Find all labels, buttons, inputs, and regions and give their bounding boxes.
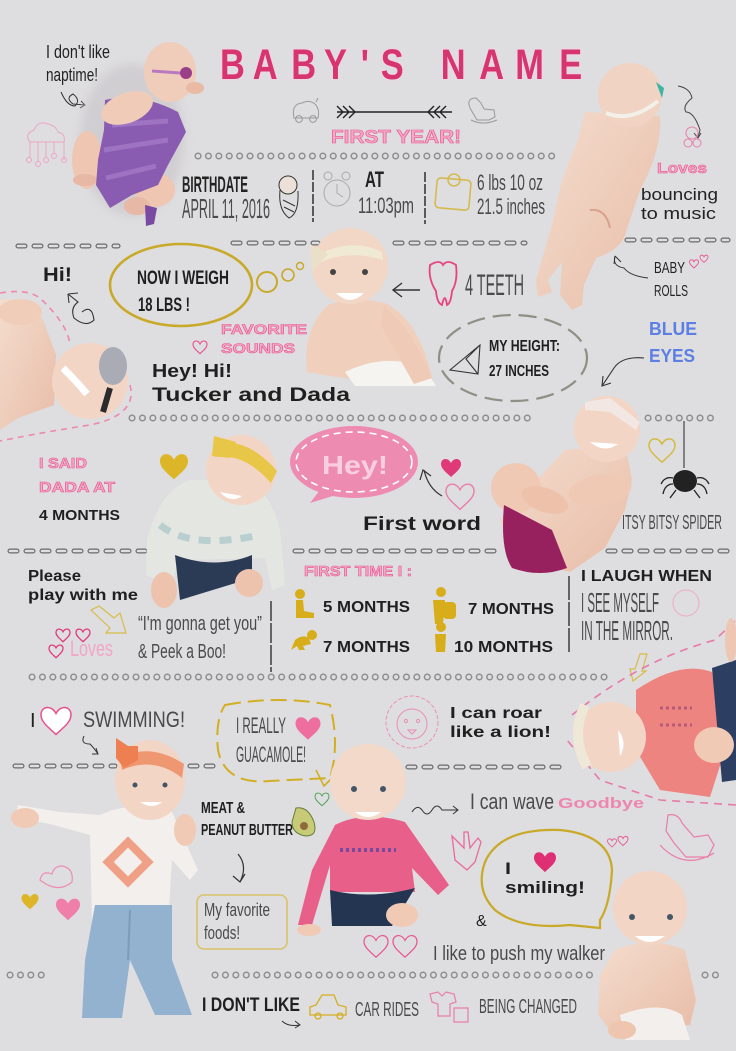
callout: hey <box>290 426 418 503</box>
photo: lying baby <box>0 292 131 441</box>
text: please play with me: play with me <box>28 587 138 604</box>
icon: heart <box>296 717 320 740</box>
icon: cloud mobile <box>26 123 66 166</box>
panel: first time I: 7 MONTHS <box>323 639 410 656</box>
text: I said dada: DADA AT <box>39 479 115 496</box>
icon: hearts and arrow <box>420 459 474 509</box>
photo: baby lying with pink top <box>567 618 736 805</box>
icon: crawling baby <box>291 630 317 650</box>
icon: heart <box>193 341 207 354</box>
icon: swaddled baby <box>279 176 298 218</box>
text: walker <box>364 913 605 965</box>
text: favorite sounds: SOUNDS <box>221 340 295 356</box>
icon: rocking horse <box>469 98 497 123</box>
text: meat and peanut butter <box>201 800 293 839</box>
birth info: 6 lbs 10 oz <box>477 170 543 195</box>
dividers <box>10 156 736 975</box>
birth info: 11:03pm <box>358 193 414 218</box>
text: baby rolls: BABY <box>654 260 685 277</box>
icon: baby face <box>673 590 699 616</box>
text: I love swimming <box>30 707 185 754</box>
callout: favorite foods <box>197 895 287 949</box>
photo: smiling baby with cream headband <box>306 228 436 386</box>
text: roar <box>450 705 551 741</box>
icon: walking baby <box>435 622 446 652</box>
text: wave goodbye <box>412 789 644 814</box>
icon: hearts <box>690 255 708 268</box>
icon: gold heart <box>160 454 188 479</box>
text: hi: Hi! <box>43 265 72 286</box>
icon: alarm clock <box>324 172 350 206</box>
callout: height: MY HEIGHT: <box>489 338 560 355</box>
text: favorite sounds <box>152 321 351 406</box>
text: favorite sounds: FAVORITE <box>221 321 307 337</box>
icon: dancing hearts <box>364 936 417 957</box>
icon: toy elephant <box>293 98 319 122</box>
callout: favorite foods: My favorite <box>204 900 270 920</box>
heading: first year: FIRST YEAR! <box>331 127 461 147</box>
arrow: squiggle to hi <box>68 293 94 324</box>
text: loves with hearts: Loves <box>70 636 113 661</box>
text: walker: & <box>476 913 487 930</box>
text: loves bouncing: to music <box>641 204 717 223</box>
photo: baby in pink top <box>297 744 449 936</box>
text: blue eyes: EYES <box>649 346 695 366</box>
icon: lion <box>386 696 438 748</box>
birth info: 21.5 inches <box>477 194 545 219</box>
icon: bear charm <box>684 127 701 147</box>
panel: first time I <box>291 563 554 656</box>
icon: standing with support <box>433 587 456 624</box>
arrow: yellow <box>91 606 126 633</box>
icon: heart <box>41 707 71 734</box>
photo: smiling baby bottom right <box>598 871 696 1040</box>
text: wave goodbye: I can wave <box>470 789 554 814</box>
panel: first time I: 10 MONTHS <box>454 639 553 656</box>
text: peek a boo <box>138 601 271 672</box>
photo: baby from behind <box>536 63 664 310</box>
panel: first time I: 7 MONTHS <box>468 601 554 618</box>
text: I said dada: 4 MONTHS <box>39 507 120 524</box>
text: loves with hearts <box>49 629 113 661</box>
text: I don't like car rides: BEING CHANGED <box>479 996 577 1018</box>
icon: hand <box>452 832 481 870</box>
birth info: BIRTHDATE <box>182 172 248 197</box>
photo: baby with yellow bow <box>146 435 285 608</box>
text: 4 TEETH <box>465 269 524 302</box>
text: I love swimming: I <box>30 710 36 732</box>
text: I said dada <box>39 455 120 524</box>
text: wave goodbye: Goodbye <box>558 795 644 812</box>
callout: guacamole: I REALLY <box>236 713 286 738</box>
text: loves bouncing: Loves <box>657 160 707 177</box>
icon: baby scale <box>435 174 471 210</box>
text: loves bouncing <box>641 160 718 223</box>
callout: guacamole <box>217 700 335 786</box>
icon: toy car <box>310 995 346 1019</box>
text: I love swimming: SWIMMING! <box>83 707 185 732</box>
arrow: down <box>233 854 245 882</box>
callout: I love smiling: smiling! <box>505 878 585 897</box>
icon: heart <box>534 852 556 872</box>
callout: guacamole: GUACAMOLE! <box>236 742 306 767</box>
text: meat and peanut butter: MEAT & <box>201 800 245 817</box>
photo: newborn in purple wrap <box>72 42 204 226</box>
text: favorite sounds: Hey! Hi! <box>152 361 232 381</box>
birth info: APRIL 11, 2016 <box>182 193 270 224</box>
photo: baby with bare body and magenta diaper <box>491 396 640 573</box>
icon: rocking horse <box>660 815 714 860</box>
text: i laugh when <box>569 568 712 652</box>
callout: height: 27 INCHES <box>489 363 549 380</box>
note: naptime: naptime! <box>46 65 98 85</box>
icon: onesie <box>430 992 468 1022</box>
text: blue eyes: BLUE <box>649 319 697 339</box>
ornament arrow <box>337 106 452 118</box>
arrow: squiggle <box>678 86 701 138</box>
callout: I love smiling <box>482 830 612 928</box>
birth info <box>182 167 545 224</box>
arrow: baby rolls squiggle <box>614 256 648 278</box>
text: i laugh when: I LAUGH WHEN <box>581 568 712 585</box>
text: roar: I can roar <box>450 705 542 722</box>
birth info: AT <box>365 167 384 192</box>
text: meat and peanut butter: PEANUT BUTTER <box>201 822 293 839</box>
subtitle ornament <box>293 98 497 123</box>
arrow: squiggle <box>61 92 85 108</box>
arrow: squiggle <box>83 736 98 754</box>
callout: now I weigh: NOW I WEIGH <box>137 268 229 289</box>
icon: duck <box>40 866 72 888</box>
arrow: squiggle to baby <box>602 358 644 386</box>
text: peek a boo: & Peek a Boo! <box>138 641 226 663</box>
title: BABY'S NAME <box>220 41 582 89</box>
text: favorite sounds: Tucker and Dada <box>152 385 351 406</box>
icon: sitting baby <box>295 589 314 618</box>
photo: baby with orange headband <box>11 738 198 1018</box>
text: loves bouncing: bouncing <box>641 185 718 204</box>
arrow: under <box>282 1021 300 1028</box>
callout: hey: Hey! <box>322 450 388 480</box>
text: I don't like car rides <box>202 992 577 1028</box>
icon: tooth <box>430 262 456 305</box>
text: baby rolls: ROLLS <box>654 283 688 300</box>
icon: gold heart small <box>22 894 38 909</box>
icons: small hearts <box>608 836 628 847</box>
icon: yellow heart <box>649 439 675 462</box>
panel: first time I: 5 MONTHS <box>323 599 410 616</box>
text: blue eyes <box>649 319 697 366</box>
text: I don't like car rides: CAR RIDES <box>355 999 419 1021</box>
callout: favorite foods: foods! <box>204 923 240 943</box>
icon: avocado <box>292 793 329 836</box>
callout: now I weigh <box>110 244 304 326</box>
text: I don't like car rides: I DON'T LIKE <box>202 995 300 1016</box>
callout: height <box>439 315 587 401</box>
icon: spider and thread <box>661 421 709 498</box>
arrow: to tooth <box>393 283 420 297</box>
callout: I love smiling: I <box>505 859 511 878</box>
icon: pink heart <box>56 899 80 920</box>
arrow: yellow down <box>630 654 647 681</box>
text: first word: First word <box>363 514 481 535</box>
note: naptime: I don't like <box>46 42 110 62</box>
arrow: squiggle <box>412 806 458 814</box>
text: baby rolls <box>654 255 708 300</box>
text: I said dada: I SAID <box>39 455 87 472</box>
panel: first time I: FIRST TIME I : <box>304 563 412 580</box>
text: peek a boo: “I'm gonna get you” <box>138 613 262 635</box>
text: please play with me <box>28 568 138 604</box>
text: please play with me: Please <box>28 568 81 585</box>
icon: paper plane <box>450 345 480 374</box>
text: walker: I like to push my walker <box>433 943 605 965</box>
callout: now I weigh: 18 LBS ! <box>138 295 190 316</box>
note: naptime <box>46 42 110 108</box>
text: roar: like a lion! <box>450 724 551 741</box>
